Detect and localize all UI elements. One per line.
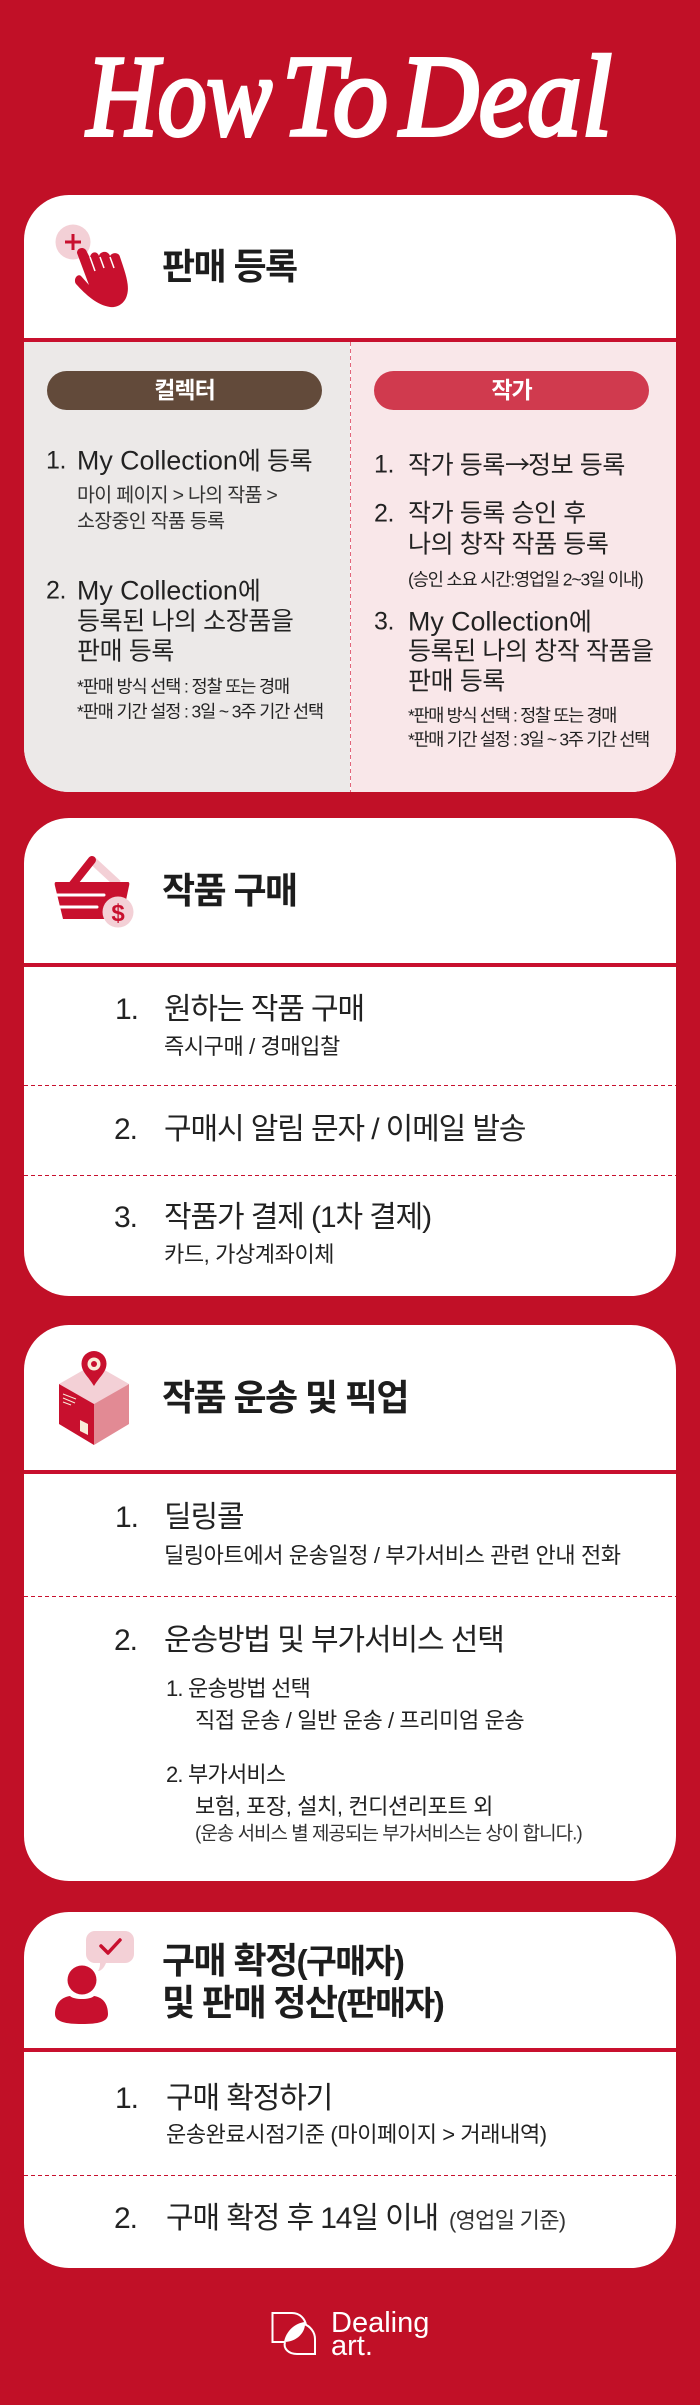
artist step 3: 등록된 나의 창작 작품을 <box>408 638 654 666</box>
collector step 2: My Collection에 <box>77 576 260 606</box>
step 1: 1. <box>115 1501 138 1534</box>
step 2: 운송방법 및 부가서비스 선택 <box>164 1624 504 1657</box>
artist step 3: 판매 등록 <box>408 668 505 696</box>
artist step 1: 작가 등록→정보 등록 <box>408 446 625 482</box>
heading: 작품 운송 및 픽업 <box>162 1377 408 1418</box>
artist step 2: 나의 창작 작품 등록 <box>408 530 608 558</box>
step 2: 2. 부가서비스 <box>166 1762 285 1787</box>
title: Deal <box>398 33 612 160</box>
panel: artwork purchase <box>24 818 676 1296</box>
step 1: 딜링아트에서 운송일정 / 부가서비스 관련 안내 전화 <box>164 1543 621 1568</box>
collector label <box>47 371 322 410</box>
logo: Dealing art <box>272 2307 429 2362</box>
artist step 3 <box>374 606 654 749</box>
heading: 및 판매 정산(판매자) <box>162 1982 443 2023</box>
step 1: 원하는 작품 구매 <box>164 993 364 1026</box>
collector step 2: *판매 방식 선택 : 정찰 또는 경매 <box>77 676 289 696</box>
artist step 1: 1. <box>374 450 394 478</box>
step 1: 딜링콜 <box>164 1501 244 1534</box>
artist step 2: (승인 소요 시간:영업일 2~3일 이내) <box>408 569 643 589</box>
collector step 2: 판매 등록 <box>77 638 174 666</box>
icon: basket with dollar coin: $ <box>111 900 125 927</box>
step 2: 2. <box>114 1624 137 1657</box>
heading: 구매 확정(구매자) <box>162 1940 403 1981</box>
collector step 1 <box>46 446 312 532</box>
step 2: 2. <box>114 1113 137 1146</box>
step 2: 구매 확정 후 14일 이내 <box>166 2202 438 2235</box>
artist label: 작가 <box>491 377 532 403</box>
panel: sales registration <box>24 195 676 792</box>
artist step 2: 작가 등록 승인 후 <box>408 500 586 528</box>
collector step 1: 1. <box>46 446 66 474</box>
step 3: 작품가 결제 (1차 결제) <box>164 1201 431 1234</box>
step 2: 2. <box>114 2202 137 2235</box>
icon: basket with dollar coin <box>54 856 134 928</box>
collector step 2: *판매 기간 설정 : 3일 ~ 3주 기간 선택 <box>77 701 323 721</box>
step 1 <box>115 2082 547 2147</box>
step 1: 구매 확정하기 <box>166 2082 332 2115</box>
title <box>84 33 612 160</box>
step 2: 직접 운송 / 일반 운송 / 프리미엄 운송 <box>195 1708 524 1733</box>
step 1 <box>115 993 364 1059</box>
step 1: 즉시구매 / 경매입찰 <box>164 1034 340 1059</box>
step 2: 보험, 포장, 설치, 컨디션리포트 외 <box>195 1794 493 1819</box>
heading: 작품 구매 <box>162 870 296 911</box>
step 1: 운송완료시점기준 (마이페이지 > 거래내역) <box>166 2122 547 2147</box>
step 3: 3. <box>114 1201 137 1234</box>
step 1: 1. <box>115 2082 138 2115</box>
collector step 2: 2. <box>46 576 66 604</box>
step 2 <box>114 2202 565 2235</box>
panel: shipping and pickup <box>24 1325 676 1881</box>
artist step 3: *판매 방식 선택 : 정찰 또는 경매 <box>408 705 616 725</box>
artist step 3: *판매 기간 설정 : 3일 ~ 3주 기간 선택 <box>408 729 649 749</box>
collector step 1: 소장중인 작품 등록 <box>77 510 224 532</box>
collector label: 컬렉터 <box>154 377 215 403</box>
step 2 <box>114 1624 582 1844</box>
title: To <box>282 33 388 160</box>
heading <box>162 1940 444 2023</box>
step 3: 카드, 가상계좌이체 <box>164 1242 334 1267</box>
step 2: 1. 운송방법 선택 <box>166 1676 310 1701</box>
icon: person with check speech bubble <box>55 1931 134 2024</box>
artist step 2: 2. <box>374 500 394 528</box>
title: How <box>85 33 272 160</box>
panel: artist <box>351 342 676 792</box>
panel: collector <box>24 342 350 792</box>
collector step 2: 등록된 나의 소장품을 <box>77 608 294 636</box>
icon: box with location pin <box>59 1351 129 1445</box>
icon: hand tapping plus <box>56 224 128 308</box>
logo: Dealing art: art. <box>331 2330 373 2362</box>
step 1 <box>115 1501 621 1568</box>
collector step 1: My Collection에 등록 <box>77 446 312 476</box>
artist label <box>374 371 649 410</box>
artist step 2 <box>374 500 643 589</box>
artist step 3: 3. <box>374 608 394 636</box>
step 2: (운송 서비스 별 제공되는 부가서비스는 상이 합니다.) <box>195 1824 582 1844</box>
heading: 판매 등록 <box>162 246 296 287</box>
collector step 2 <box>46 576 323 721</box>
step 3 <box>114 1201 431 1267</box>
collector step 1: 마이 페이지 > 나의 작품 > <box>77 484 277 506</box>
step 2: (영업일 기준) <box>449 2208 565 2233</box>
panel: purchase confirmation and settlement <box>24 1912 676 2268</box>
artist step 3: My Collection에 <box>408 606 591 636</box>
logo: Dealing art: Dealing <box>331 2307 429 2339</box>
step 1: 1. <box>115 993 138 1026</box>
step 2: 구매시 알림 문자 / 이메일 발송 <box>164 1113 525 1146</box>
